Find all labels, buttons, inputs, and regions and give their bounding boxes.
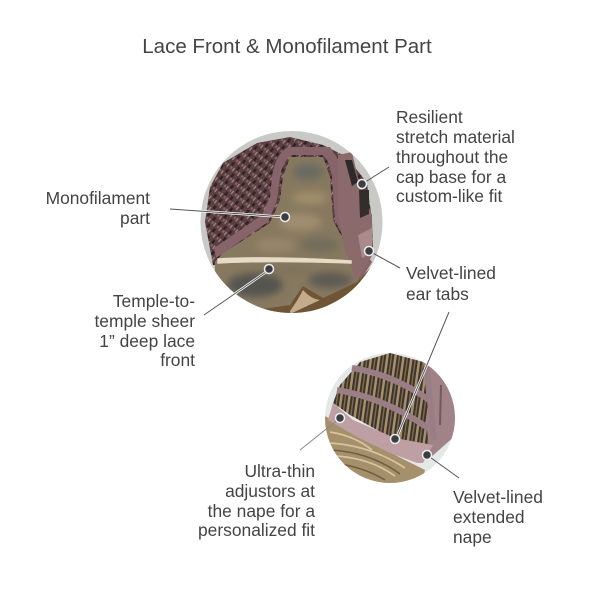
velvet nape xyxy=(328,403,433,463)
label: adjustors: Ultra-thin xyxy=(244,461,315,481)
stretch bands xyxy=(336,362,430,430)
leader: adjustors xyxy=(300,414,344,450)
label: stretch material: Resilient xyxy=(396,107,463,127)
label: adjustors: personalized fit xyxy=(198,520,315,540)
leader: lace front xyxy=(204,264,274,315)
leader: monofilament part xyxy=(170,209,290,222)
label: stretch material: throughout the xyxy=(396,147,508,167)
cap stretch material xyxy=(205,137,373,285)
leader: velvet nape strip xyxy=(390,312,449,444)
right mauve side xyxy=(426,366,455,456)
hair at bottom xyxy=(264,268,370,313)
label: stretch material: stretch material xyxy=(396,127,515,147)
leader: extended nape xyxy=(422,450,459,478)
lace panel xyxy=(215,157,362,320)
label: ear tabs: Velvet-lined xyxy=(406,263,496,283)
title: Lace Front & Monofilament Part xyxy=(142,35,432,58)
monofilament border xyxy=(214,147,372,278)
label: temple-to-temple lace: Temple-to- xyxy=(113,291,195,311)
photo: lace front cap xyxy=(200,131,382,320)
label: stretch material: custom-like fit xyxy=(396,186,502,206)
label: ear tabs: ear tabs xyxy=(406,284,469,304)
label: temple-to-temple lace: 1” deep lace xyxy=(99,331,195,351)
label: temple-to-temple lace: temple sheer xyxy=(94,311,195,331)
leader: stretch material xyxy=(358,167,389,188)
right pink band xyxy=(338,152,372,282)
label: extended nape: nape xyxy=(453,527,492,547)
label: extended nape: extended xyxy=(453,507,525,527)
photo: nape of cap xyxy=(320,353,456,490)
leader: ear tabs xyxy=(364,246,400,268)
label: temple-to-temple lace: front xyxy=(160,350,195,370)
label: monofilament part: part xyxy=(120,208,150,228)
hair xyxy=(325,416,425,483)
label: monofilament part: Monofilament xyxy=(46,188,150,208)
wefts xyxy=(333,353,429,444)
label: adjustors: the nape for a xyxy=(208,501,315,521)
white sheer lace band xyxy=(218,258,351,263)
label: stretch material: cap base for a xyxy=(396,167,507,187)
label: adjustors: adjustors at xyxy=(225,481,315,501)
label: extended nape: Velvet-lined xyxy=(453,487,543,507)
